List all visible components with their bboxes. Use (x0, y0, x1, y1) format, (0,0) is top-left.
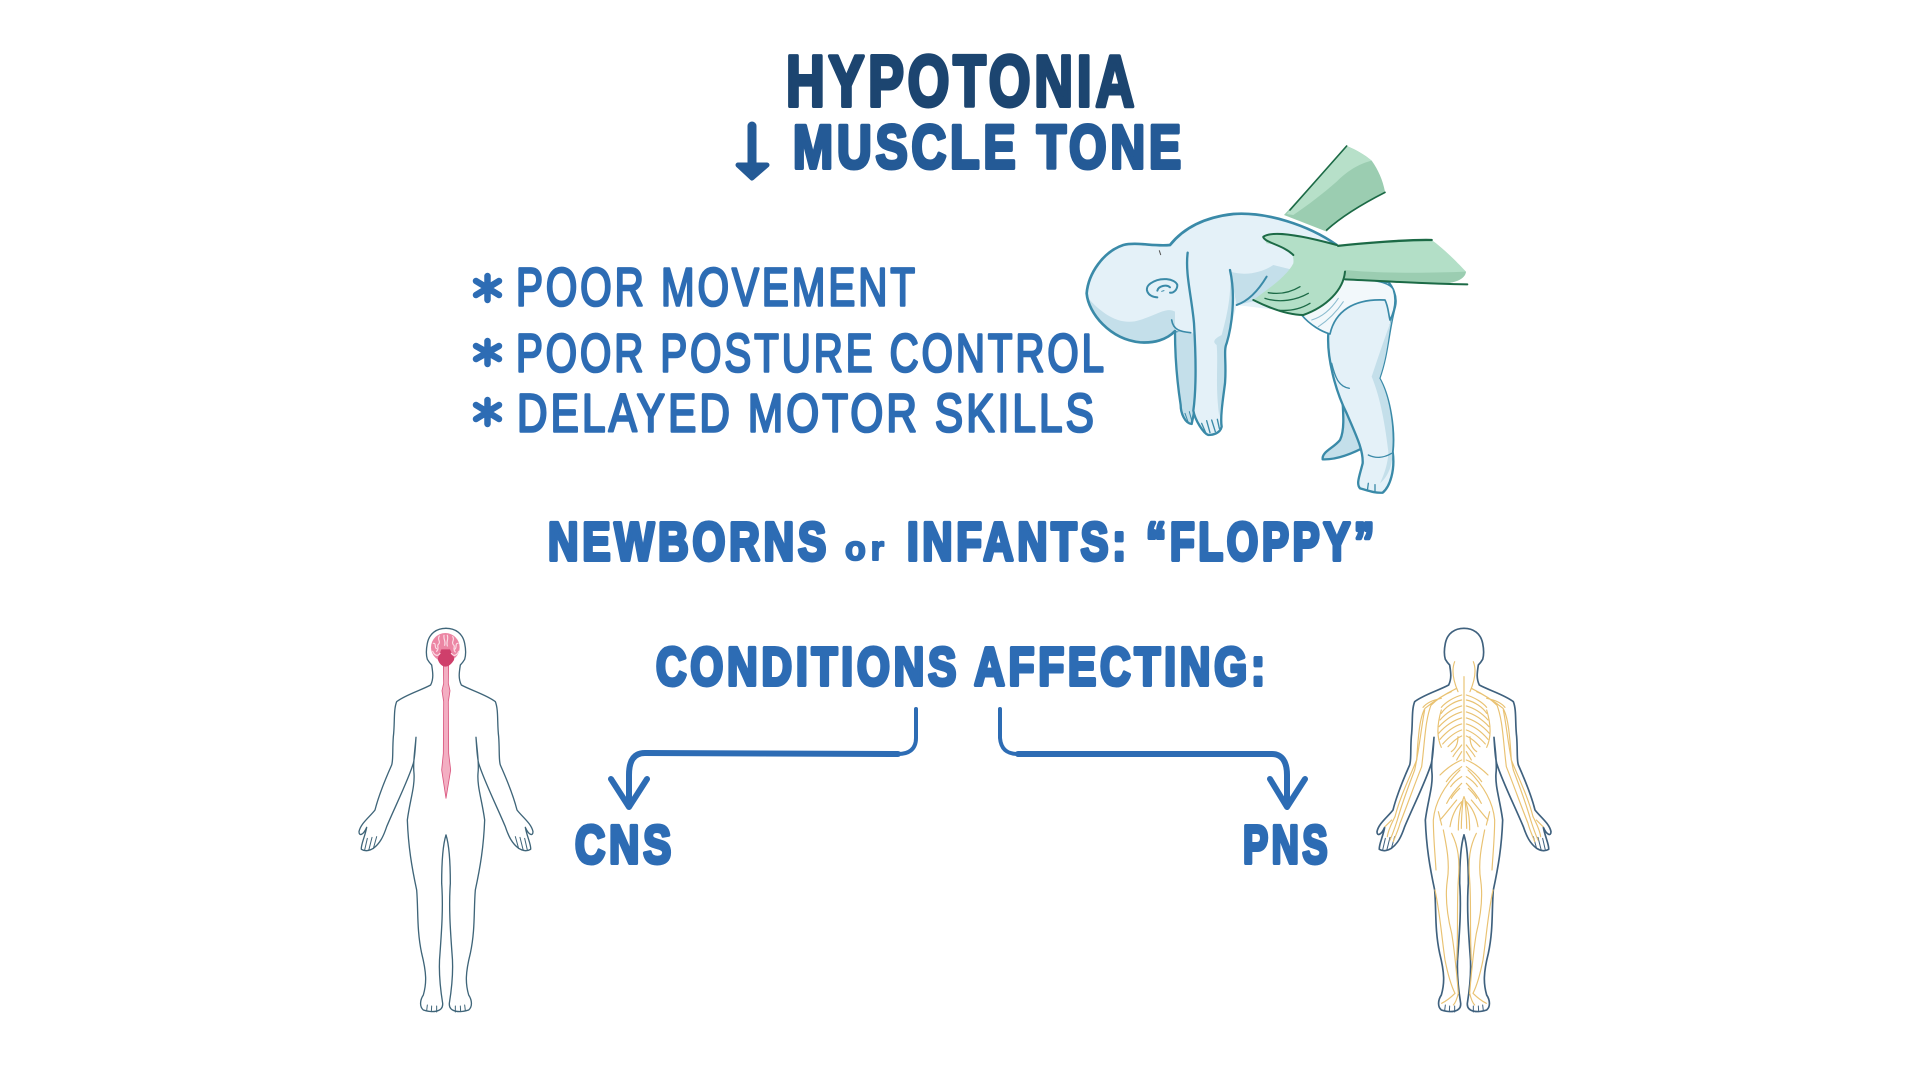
diaper (1302, 277, 1395, 334)
text: delayed motor skills: DELAYED MOTOR SKILLS (517, 384, 1097, 444)
arrow: to PNS (1000, 709, 1305, 807)
icon: down arrow (738, 126, 767, 178)
subtitle: decreased muscle tone (738, 113, 1185, 181)
text: poor posture control: POOR POSTURE CONTROL (516, 324, 1107, 384)
arrow: to CNS (611, 709, 916, 807)
title: Hypotonia: HYPOTONIA (786, 42, 1138, 122)
spinal cord (442, 662, 451, 798)
text: newborns or infants floppy: INFANTS: (907, 512, 1130, 572)
illustration: floppy infant held by hands (1087, 146, 1467, 493)
bullet: poor posture control (476, 341, 499, 364)
label: CNS: CNS (575, 815, 675, 875)
text: muscle tone: MUSCLE TONE (793, 113, 1185, 181)
body outline (1377, 628, 1551, 1012)
bullet: delayed motor skills (476, 400, 499, 424)
list: signs of hypotonia (476, 258, 1107, 444)
baby belly line (1237, 277, 1267, 305)
text: newborns or infants floppy (548, 512, 1378, 572)
nerves (1385, 662, 1543, 1005)
text: poor movement: POOR MOVEMENT (516, 258, 918, 318)
baby head and torso (1087, 214, 1340, 343)
brain (431, 633, 460, 667)
back arm of carer (1284, 146, 1385, 232)
near arm of carer (1253, 234, 1467, 315)
figure: central nervous system (359, 628, 533, 1012)
bullet: poor movement (476, 276, 499, 300)
body outline (359, 628, 533, 1012)
text: newborns or infants floppy: “FLOPPY” (1146, 512, 1378, 572)
baby near arm (1187, 253, 1233, 435)
baby far arm (1175, 327, 1197, 424)
baby near leg (1328, 282, 1396, 493)
text: newborns or infants floppy: NEWBORNS (548, 512, 830, 572)
heading: conditions affecting: CONDITIONS AFFECTING: (656, 637, 1269, 697)
figure: peripheral nervous system (1377, 628, 1551, 1012)
label: PNS: PNS (1243, 815, 1331, 875)
text: newborns or infants floppy: or (845, 530, 889, 568)
baby ear (1147, 279, 1177, 297)
baby far leg (1323, 387, 1368, 459)
